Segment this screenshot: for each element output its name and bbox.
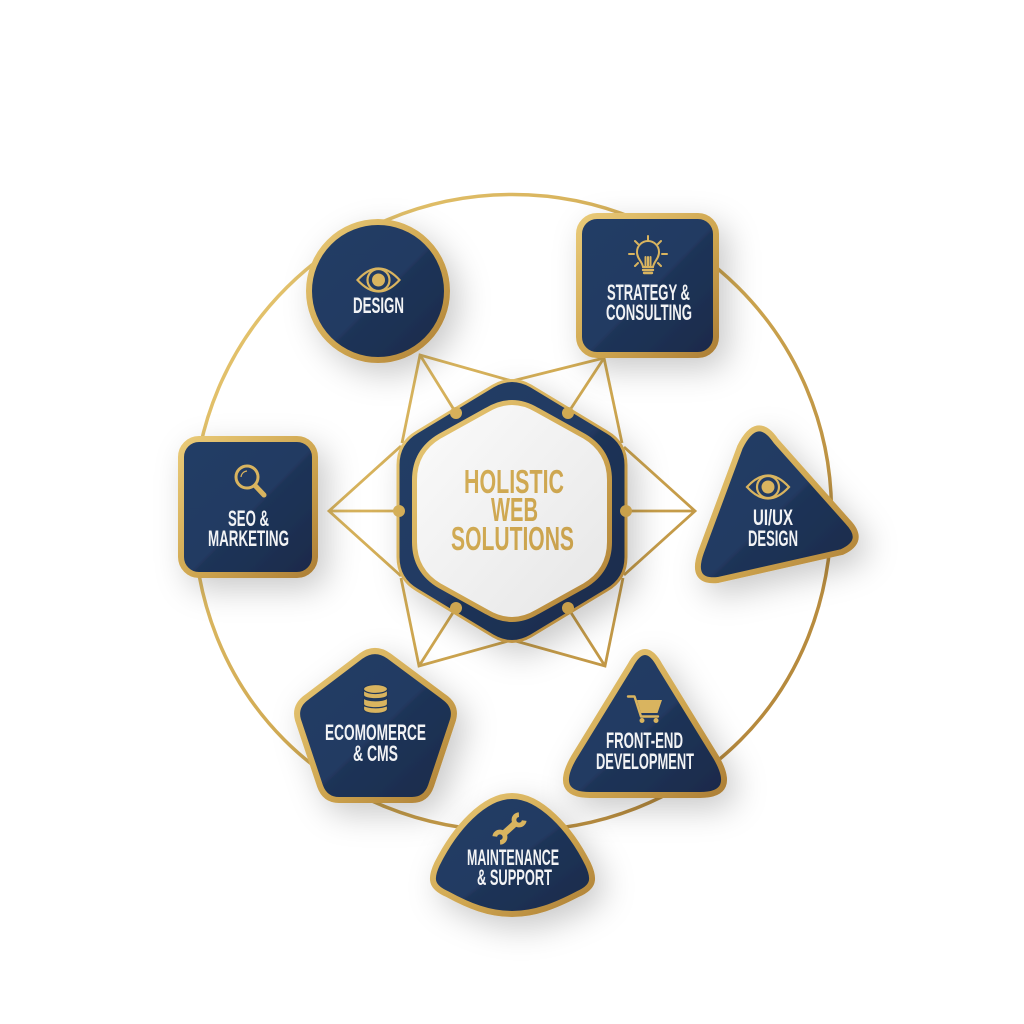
label: [606, 280, 692, 325]
center title: HOLISTIC: [464, 463, 564, 500]
node: strategy and consulting: [579, 216, 716, 355]
star line network: [329, 355, 695, 666]
label: & CMS: [353, 741, 398, 766]
icon: eye: [358, 268, 400, 292]
label: & SUPPORT: [477, 865, 552, 890]
icon: light bulb: [629, 236, 667, 273]
label: UI/UX: [753, 505, 793, 530]
node: ecommerce and cms: [297, 651, 454, 800]
label: ECOMOMERCE: [325, 720, 426, 745]
label: FRONT-END: [606, 728, 683, 753]
label: DESIGN: [748, 526, 798, 551]
label: [467, 845, 559, 890]
label: STRATEGY &: [607, 280, 690, 305]
center title: WEB: [491, 491, 538, 528]
junction dots: [393, 407, 632, 614]
icon: magnifying glass: [236, 466, 264, 495]
node: design: [309, 222, 447, 360]
icon: eye: [747, 476, 789, 498]
label: [748, 505, 798, 551]
central hexagon: holistic web solutions: [393, 380, 632, 642]
label: MARKETING: [208, 526, 289, 551]
label: DESIGN: [353, 293, 404, 318]
label: [208, 506, 289, 551]
icon: database: [364, 684, 388, 714]
node: ui/ux design: [698, 428, 856, 580]
node: front-end development: [566, 652, 724, 795]
icon: wrench: [494, 814, 525, 843]
node: maintenance and support: [433, 796, 592, 914]
node: seo and marketing: [181, 439, 315, 575]
label: SEO &: [228, 506, 269, 531]
label: CONSULTING: [606, 300, 692, 325]
label: DEVELOPMENT: [596, 749, 694, 774]
label: [325, 720, 426, 766]
label: [596, 728, 694, 774]
center title: SOLUTIONS: [451, 520, 574, 557]
center title: [451, 463, 574, 557]
icon: shopping cart: [628, 696, 662, 723]
outer ring: [194, 194, 832, 831]
label: MAINTENANCE: [467, 845, 559, 870]
